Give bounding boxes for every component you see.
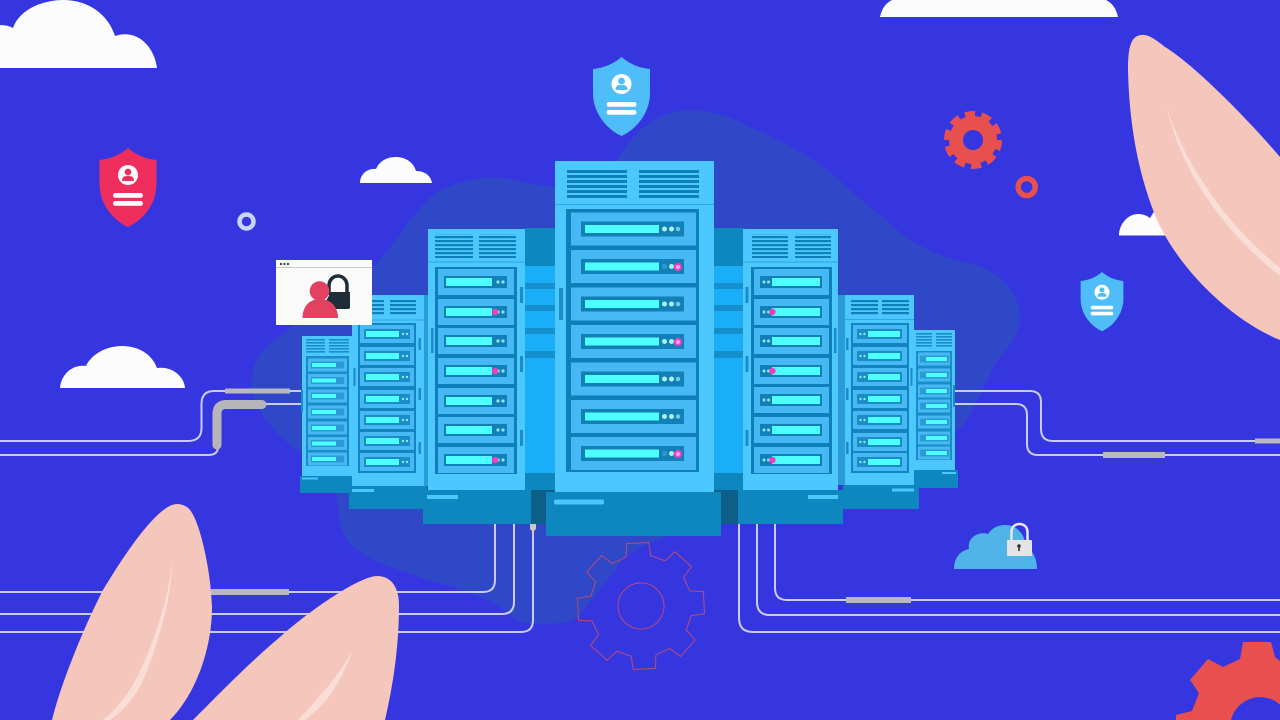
icon: user [302, 281, 338, 318]
wire highlight: right edge [1255, 438, 1280, 444]
server rack: far right [914, 330, 958, 488]
padlock [1007, 524, 1032, 556]
outline gear [575, 540, 707, 672]
shield: blue top [593, 57, 650, 136]
shield: blue small [1081, 272, 1123, 331]
gear: red top right [947, 114, 999, 166]
server rack: inner left [423, 229, 531, 524]
wire highlight: left top [225, 388, 290, 394]
gear: red bottom right [1176, 642, 1280, 720]
shield: red [100, 148, 156, 227]
wire highlight: bottom right [846, 597, 911, 603]
ring: red [1018, 178, 1035, 196]
leaf vein [1167, 108, 1280, 276]
wire highlight: left elbow [217, 404, 262, 445]
window dots [280, 263, 289, 265]
cloud with padlock [954, 524, 1037, 569]
back unit right [714, 228, 745, 490]
leaf: bottom centre [193, 576, 399, 720]
wires: bottom right [739, 520, 1280, 632]
leaf: bottom left [52, 504, 212, 720]
back unit left [525, 228, 557, 490]
login window [276, 260, 372, 325]
wire highlight: right lower [1103, 452, 1165, 458]
wires: left [0, 391, 302, 455]
cloud: top left [0, 0, 157, 68]
status lights [769, 309, 776, 463]
leaf vein [103, 560, 172, 720]
back plinth [522, 488, 748, 524]
server rack: centre [546, 161, 721, 536]
ring: pale [240, 214, 254, 228]
wire highlight: bottom left [211, 589, 289, 595]
server back units [522, 228, 748, 524]
leaf: top right [1128, 35, 1280, 340]
leaf vein [298, 650, 352, 720]
wire connector cap [530, 524, 536, 532]
server rack: inner right [738, 229, 843, 524]
cloud: top centre [880, 0, 1118, 17]
icon: padlock [326, 276, 350, 309]
cloud: small centre [360, 157, 432, 183]
status lights [662, 263, 682, 458]
cloud: behind top right leaf [1119, 210, 1175, 236]
server rack: left [349, 295, 429, 509]
status lights [492, 309, 498, 463]
server rack: right [838, 295, 919, 509]
cloud: left [60, 346, 185, 388]
wires: right [955, 391, 1280, 455]
server rack: far left [300, 336, 354, 493]
background blob [252, 110, 1020, 624]
wires: bottom left [0, 520, 533, 632]
